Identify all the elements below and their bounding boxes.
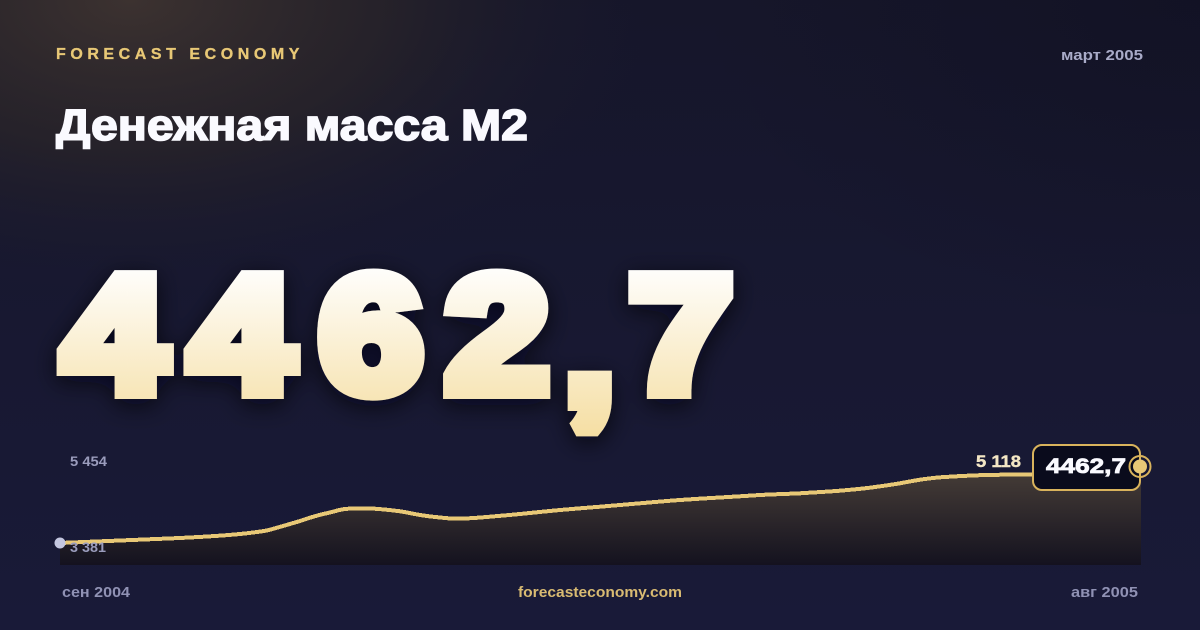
peak label: 5 118 <box>976 452 1021 471</box>
axis max label: 5 454 <box>70 453 107 469</box>
chart area fill <box>60 474 1141 565</box>
chart <box>54 445 1150 565</box>
title: Денежная масса М2 <box>56 101 528 150</box>
brand label: FORECAST ECONOMY <box>56 46 304 63</box>
start point <box>54 538 66 548</box>
current point marker <box>1130 456 1150 477</box>
big value: 4462,7 <box>63 244 732 439</box>
chart line <box>60 474 1034 543</box>
end date: авг 2005 <box>1071 584 1138 601</box>
current value badge: 4462,7 <box>1046 455 1126 478</box>
current value badge <box>1033 445 1140 490</box>
date label: март 2005 <box>1061 47 1143 64</box>
source link: forecasteconomy.com <box>518 584 682 601</box>
axis min label: 3 381 <box>70 539 106 555</box>
start date: сен 2004 <box>62 584 131 601</box>
